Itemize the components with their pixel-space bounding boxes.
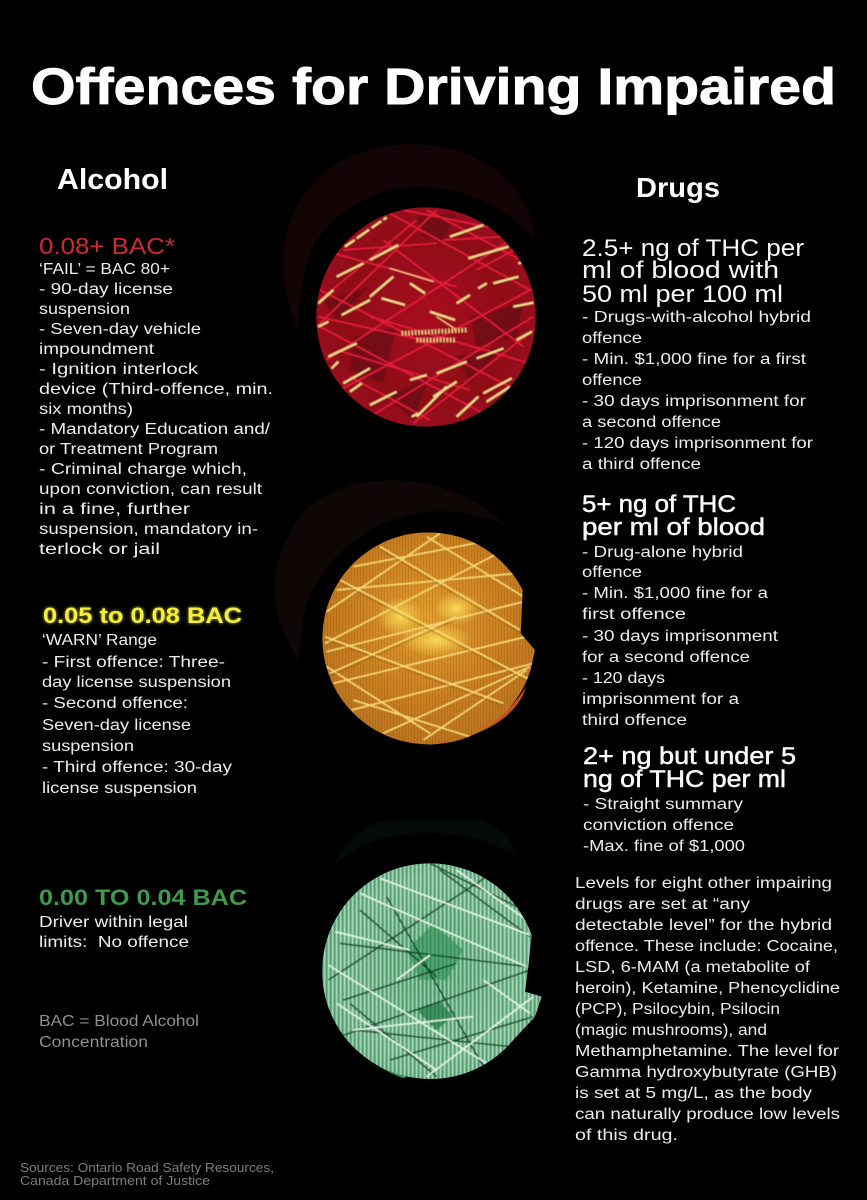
text block: fail consequences: terlock or jail	[39, 541, 160, 558]
text block: drug-alone penalties	[582, 544, 779, 729]
heading: 0.08+ BAC: 0.08+ BAC*	[39, 233, 175, 259]
text block: hybrid offence penalties: - Min. $1,000 fine for a first	[582, 351, 807, 368]
text block: drug-alone penalties: third offence	[582, 712, 687, 729]
text block: drug-alone penalties: - Drug-alone hybrid	[582, 544, 743, 561]
traffic light: red lamp	[283, 144, 540, 430]
text block: fail consequences: device (Third-offence, min.	[39, 381, 273, 398]
text block: drug-alone penalties: for a second offence	[582, 649, 750, 666]
heading: Drugs: Drugs	[636, 172, 720, 203]
text block: summary offence: -Max. fine of $1,000	[583, 838, 745, 855]
note: BAC definition: Concentration	[39, 1034, 148, 1051]
text block: hybrid offence penalties	[582, 309, 813, 473]
heading: 2+ ng but under 5 ng: 2+ ng but under 5	[583, 743, 796, 770]
panel: 0.00 to 0.04 BAC	[39, 885, 247, 951]
text block: other impairing drugs: can naturally produce low levels	[575, 1106, 840, 1123]
text block: warn consequences: day license suspension	[42, 674, 231, 691]
text block: summary offence: - Straight summary	[583, 796, 743, 813]
sources	[20, 1161, 274, 1188]
text block: warn consequences: license suspension	[42, 780, 197, 797]
filament glare in lamp centre	[402, 330, 467, 340]
text block: hybrid offence penalties: a third offence	[582, 456, 701, 473]
text block: summary offence	[583, 796, 745, 855]
text block: fail consequences: upon conviction, can result	[39, 481, 263, 498]
heading: 2.5+ ng of THC: 2.5+ ng of THC per	[582, 235, 804, 262]
heading: 0.00 to 0.04 BAC: 0.00 TO 0.04 BAC	[39, 885, 247, 910]
text block: warn consequences: suspension	[42, 738, 134, 755]
text block: other impairing drugs: (PCP), Psilocybin, Psilocin	[575, 1001, 780, 1018]
heading: 2.5+ ng of THC	[582, 235, 804, 308]
text block: hybrid offence penalties: offence	[582, 372, 642, 389]
heading: 2.5+ ng of THC: ml of blood with	[582, 257, 779, 284]
text block: warn consequences: - Third offence: 30-day	[42, 759, 232, 776]
text block: warn consequences: Seven-day license	[42, 717, 191, 734]
text block: hybrid offence penalties: - 120 days imprisonment for	[582, 435, 813, 452]
text block: warn consequences	[42, 632, 232, 797]
heading: 5+ ng of THC: 5+ ng of THC	[582, 491, 736, 518]
text block: other impairing drugs	[575, 875, 840, 1144]
sources: Canada Department of Justice	[20, 1174, 210, 1188]
text block: other impairing drugs: Gamma hydroxybutyrate (GHB)	[575, 1064, 837, 1081]
text block: other impairing drugs: of this drug.	[575, 1127, 678, 1144]
text block: fail consequences	[39, 261, 273, 558]
heading: Alcohol: Alcohol	[57, 164, 168, 196]
text block: fail consequences: impoundment	[39, 341, 155, 358]
text block: fail consequences: - Mandatory Education and/	[39, 421, 271, 438]
text block: drug-alone penalties: offence	[582, 564, 642, 581]
text block: other impairing drugs: LSD, 6-MAM (a metabolite of	[575, 959, 811, 976]
text block: summary offence: conviction offence	[583, 817, 734, 834]
text block: hybrid offence penalties: - 30 days imprisonment for	[582, 393, 806, 410]
text block: hybrid offence penalties: offence	[582, 330, 642, 347]
heading: 2.5+ ng of THC: 50 ml per 100 ml	[582, 281, 783, 308]
text block: fail consequences: - Seven-day vehicle	[39, 321, 201, 338]
text block: warn consequences: ‘WARN’ Range	[42, 632, 157, 649]
heading: 2+ ng but under 5 ng: ng of THC per ml	[583, 766, 786, 793]
text block: hybrid offence penalties: a second offence	[582, 414, 721, 431]
text block: other impairing drugs: heroin), Ketamine, Phencyclidine	[575, 980, 840, 997]
title: Offences for Driving Impaired	[31, 58, 836, 115]
text block: drug-alone penalties: imprisonment for a	[582, 691, 739, 708]
text block: fail consequences: in a fine, further	[39, 501, 190, 518]
heading: 5+ ng of THC: per ml of blood	[582, 514, 765, 541]
heading: 0.05 to 0.08 BAC: 0.05 to 0.08 BAC	[43, 603, 242, 628]
traffic light: amber lamp	[275, 480, 540, 750]
note: BAC definition: BAC = Blood Alcohol	[39, 1013, 199, 1030]
text block: fail consequences: suspension	[39, 301, 130, 318]
panel: 2.5+ ng of THC	[582, 235, 813, 473]
text block: fail consequences: - Criminal charge which,	[39, 461, 247, 478]
text block: other impairing drugs: Levels for eight other impairing	[575, 875, 832, 892]
panel: 5+ ng of THC	[582, 491, 779, 729]
text block: drug-alone penalties: - 30 days imprisonment	[582, 628, 779, 645]
text block: drug-alone penalties: first offence	[582, 606, 686, 623]
heading: 5+ ng of THC	[582, 491, 765, 541]
text block: fail consequences: six months)	[39, 401, 133, 418]
text block: within limits	[39, 914, 189, 951]
traffic light: green lamp	[317, 820, 550, 1090]
text block: drug-alone penalties: - 120 days	[582, 670, 665, 687]
text block: within limits: limits: No offence	[39, 934, 189, 951]
text block: other impairing drugs: Methamphetamine. The level for	[575, 1043, 839, 1060]
text block: hybrid offence penalties: - Drugs-with-alcohol hybrid	[582, 309, 811, 326]
note: BAC definition	[39, 1013, 199, 1051]
heading: 2+ ng but under 5 ng	[583, 743, 796, 793]
panel: 0.05 to 0.08 BAC	[42, 603, 242, 797]
text block: within limits: Driver within legal	[39, 914, 188, 931]
text block: fail consequences: ‘FAIL’ = BAC 80+	[39, 261, 170, 278]
text block: fail consequences: - 90-day license	[39, 281, 173, 298]
panel: 2+ ng but under 5 ng	[583, 743, 796, 855]
text block: fail consequences: or Treatment Program	[39, 441, 218, 458]
text block: other impairing drugs: drugs are set at “any	[575, 896, 750, 913]
heading: 0.05 to 0.08 BAC: 0.05 to 0.08 BAC	[43, 603, 242, 628]
text block: fail consequences: suspension, mandatory in-	[39, 521, 258, 538]
text block: other impairing drugs: offence. These include: Cocaine,	[575, 938, 838, 955]
text block: other impairing drugs: detectable level” for the hybrid	[575, 917, 832, 934]
text block: warn consequences: - First offence: Three-	[42, 654, 225, 671]
text block: other impairing drugs: is set at 5 mg/L, as the body	[575, 1085, 812, 1102]
sources: Sources: Ontario Road Safety Resources,	[20, 1161, 274, 1175]
text block: fail consequences: - Ignition interlock	[39, 361, 198, 378]
panel: 0.08+ BAC	[39, 233, 273, 558]
text block: warn consequences: - Second offence:	[42, 695, 188, 712]
text block: drug-alone penalties: - Min. $1,000 fine for a	[582, 585, 768, 602]
text block: other impairing drugs: (magic mushrooms), and	[575, 1022, 767, 1039]
